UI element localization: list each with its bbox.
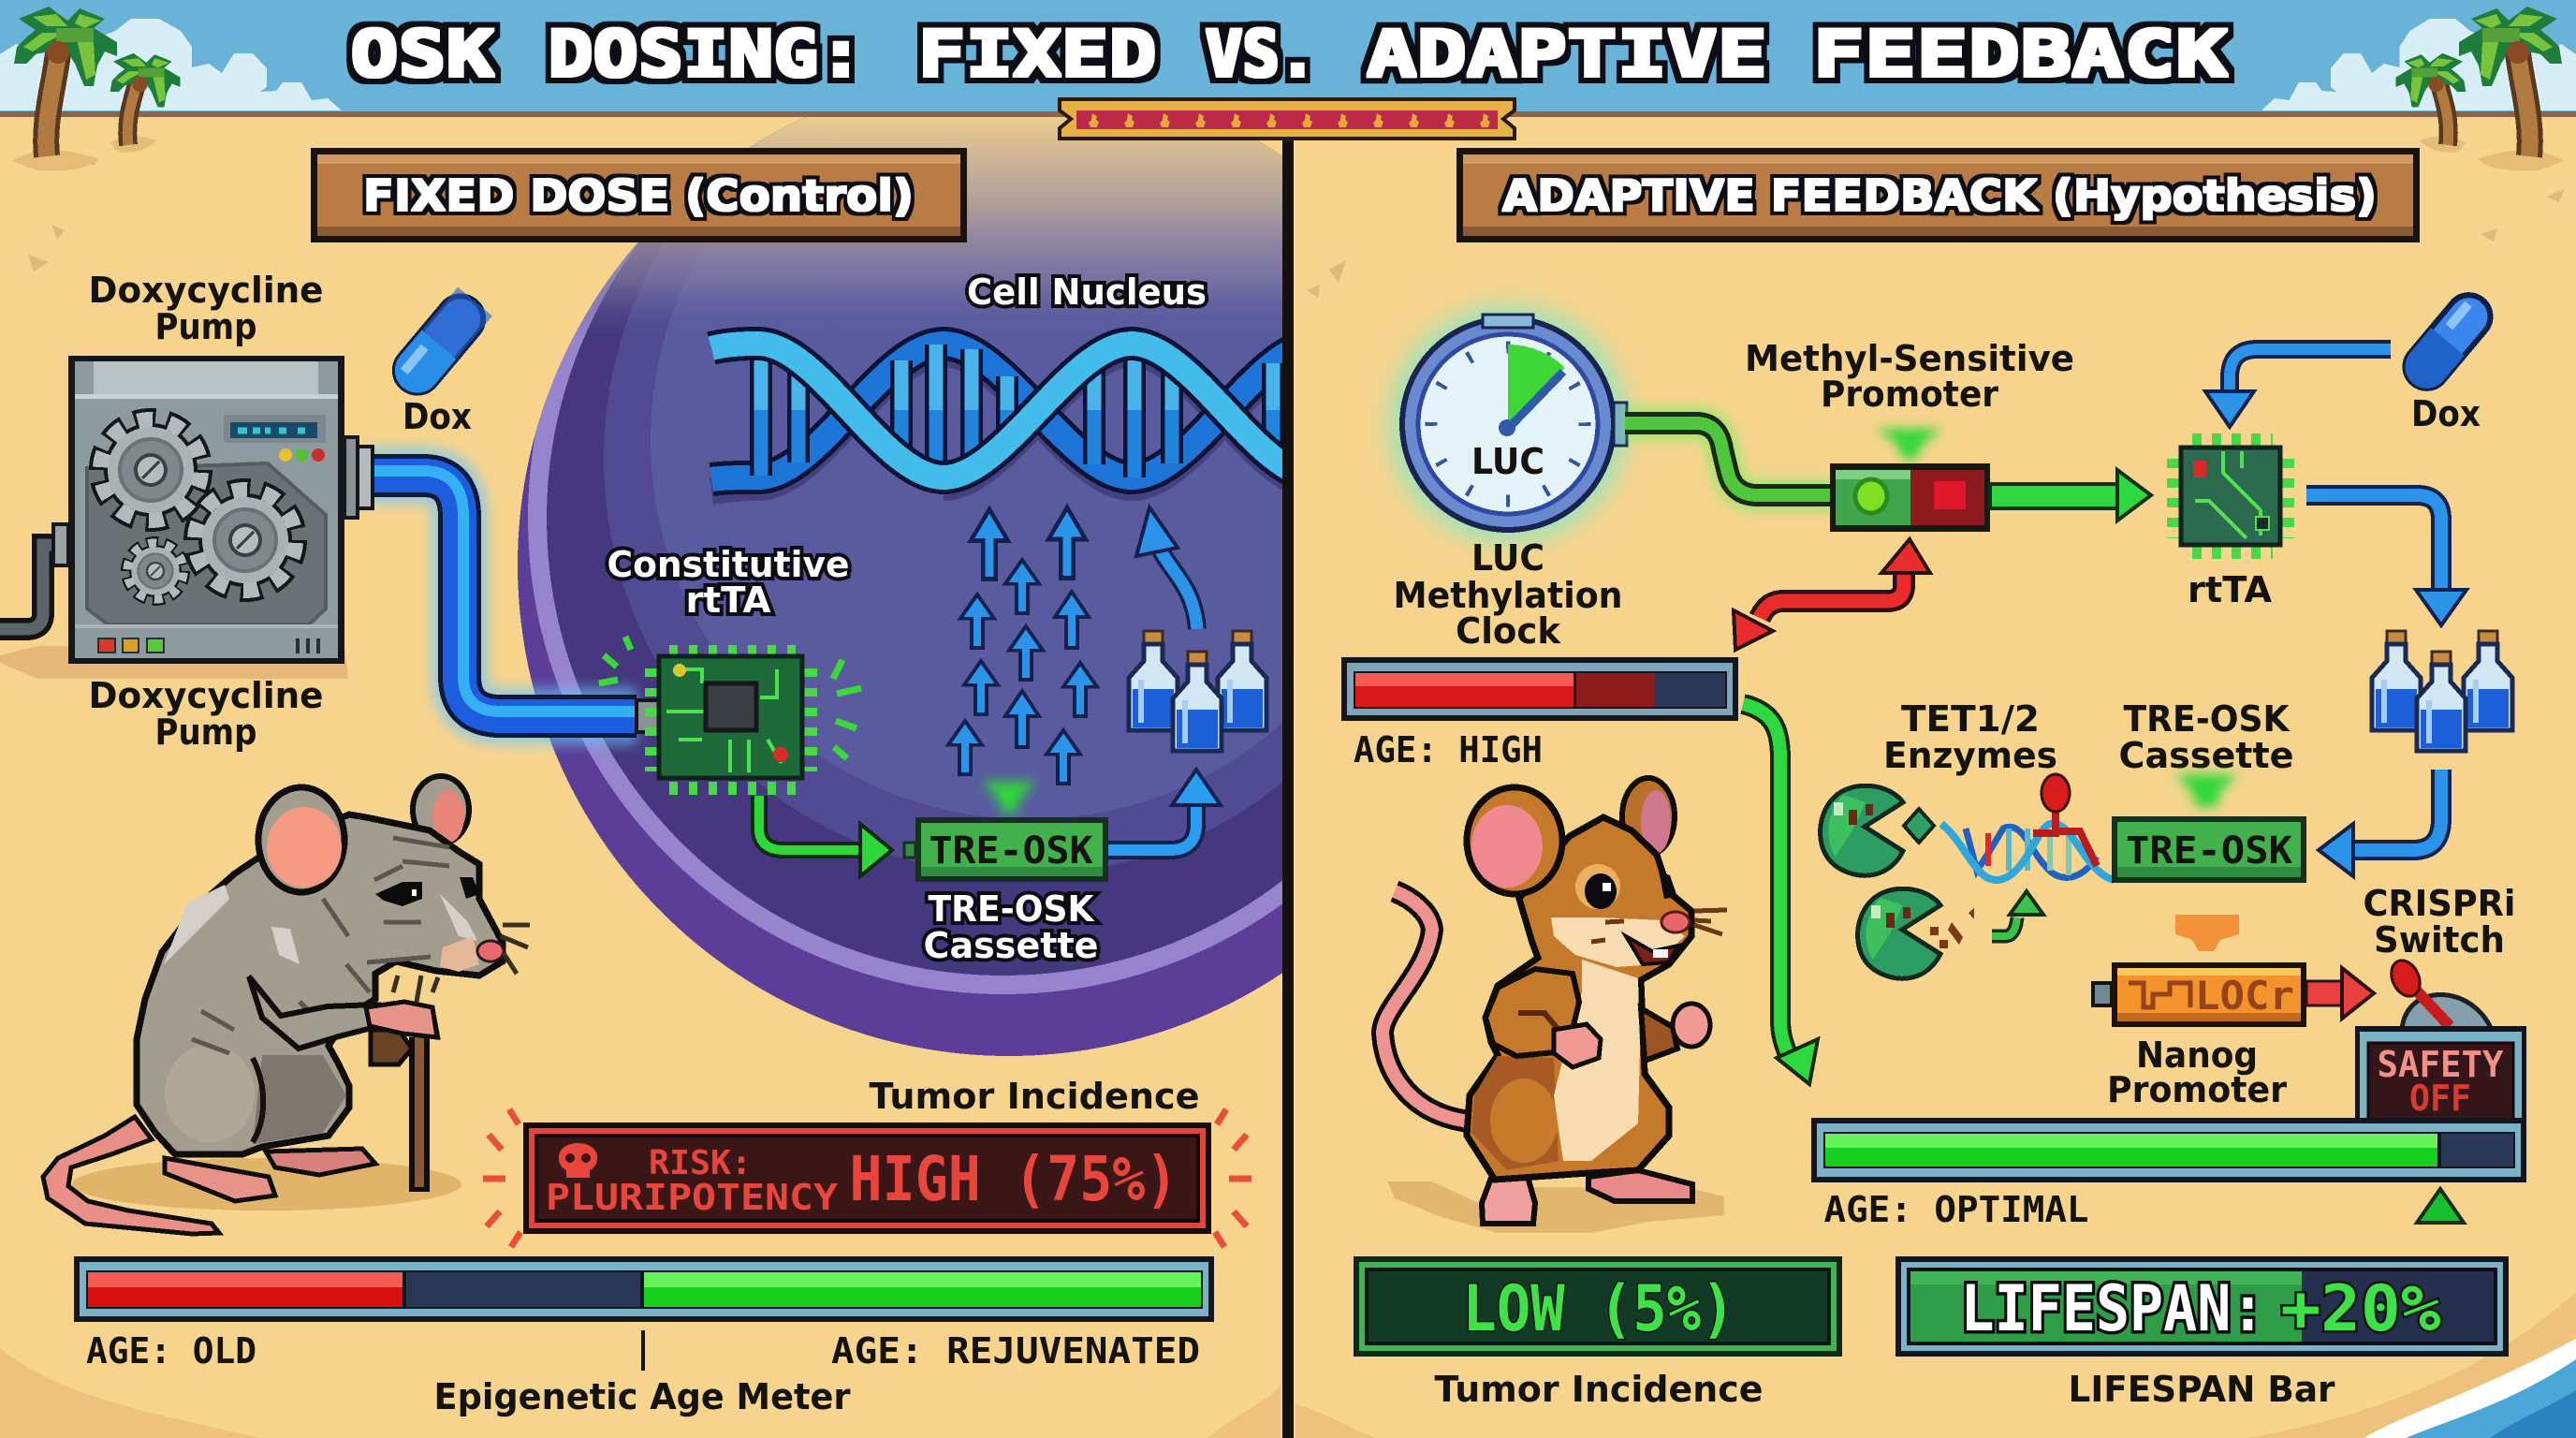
meter tick [641, 1330, 645, 1371]
mouse face patch [1551, 917, 1685, 967]
rat cane [371, 1030, 430, 1192]
label: age rejuvenated: AGE: REJUVENATED [831, 1330, 1200, 1372]
label: nanog promoter [2107, 1034, 2287, 1110]
rat arm and paw [249, 976, 437, 1049]
nucleus fade into sand [583, 117, 1282, 320]
icon: dox pill right [2396, 286, 2499, 397]
label: constitutive rtTA: rtTA [685, 580, 771, 621]
arrow: dox to chip [2205, 349, 2391, 427]
glow arrow: TRE activation right [2175, 774, 2237, 807]
LUC clock: LUC [1471, 441, 1544, 482]
label: CRISPRi switch: CRISPRi [2363, 883, 2516, 924]
arrow: vials to TRE-OSK right [2319, 770, 2441, 876]
rat highlights [164, 885, 477, 964]
sand darker corners [0, 1292, 2576, 1438]
heading board: fixed dose: FIXED DOSE (Control) [363, 170, 914, 221]
label: TRE-OSK cassette left [923, 888, 1099, 966]
label: nanog promoter: Nanog [2136, 1034, 2258, 1076]
label: methyl-sensitive promoter: Promoter [1821, 374, 1998, 415]
crumbs [1930, 908, 1974, 948]
label: cell nucleus: Cell Nucleus [967, 271, 1207, 313]
icon: pump cable [0, 524, 68, 629]
label: doxycycline pump bottom: Doxycycline [88, 675, 324, 716]
LUC clock [1388, 304, 1628, 544]
old gray rat [43, 776, 530, 1234]
epigenetic age meter [74, 1256, 1214, 1322]
icon: skull [559, 1143, 597, 1178]
rat haunch [165, 1045, 255, 1142]
mouse shadow [1387, 1181, 1724, 1233]
panel: low tumor incidence: LOW (5%) [1462, 1272, 1735, 1346]
label: CRISPRi switch [2363, 883, 2516, 961]
label: LUC methylation clock: Clock [1456, 610, 1561, 652]
mouse right arm [1641, 1008, 1677, 1061]
label: TRE-OSK cassette right: TRE-OSK [2123, 698, 2291, 740]
DNA double helix [711, 343, 1318, 491]
nanog orange box [2112, 962, 2306, 1027]
label: doxycycline pump bottom: Pump [155, 712, 256, 753]
mouse whiskers [1591, 910, 1727, 942]
methyl-sensitive promoter switch [1830, 463, 1990, 532]
mouse left foot [1482, 1170, 1535, 1224]
label: LUC methylation clock: LUC [1471, 537, 1544, 579]
icon: TET enzyme pacman bottom [1858, 888, 1940, 978]
small green curved arrow [1992, 891, 2043, 936]
pipe: blue flow to chip [370, 471, 637, 716]
icon: dox pill [386, 287, 492, 402]
sand shadow under pump [0, 646, 348, 679]
title: VS. [1206, 18, 1316, 92]
title: ADAPTIVE [1367, 18, 1767, 92]
label: age high: AGE: HIGH [1354, 729, 1543, 770]
label: doxycycline pump top: Pump [155, 306, 256, 347]
sky [0, 0, 2576, 111]
arrow: chip to cassette [759, 796, 892, 876]
safety off switch panel: SAFETY [2378, 1044, 2504, 1085]
nanog orange box: LOCr [2195, 973, 2294, 1019]
label: methyl-sensitive promoter: Methyl-Sensitive [1745, 338, 2074, 379]
TRE-OSK box right [2112, 816, 2306, 883]
rat nose and whiskers [477, 941, 504, 961]
rat body [137, 814, 503, 1154]
glow arrow: orange [2175, 915, 2239, 951]
mouse right paw [1673, 1004, 1710, 1047]
rat wrinkles [192, 838, 449, 1053]
mouse left paw [1554, 1024, 1601, 1067]
up arrows: transcription burst [948, 507, 1097, 784]
label: TRE-OSK cassette left: TRE-OSK [929, 888, 1095, 930]
panel: lifespan bar: +20% [2280, 1272, 2441, 1346]
label: TET1/2 enzymes: Enzymes [1883, 735, 2057, 776]
mouse shaded lower body [1471, 1056, 1559, 1170]
label: TET1/2 enzymes: TET1/2 [1901, 698, 2040, 740]
label: age old: AGE: OLD [86, 1330, 256, 1372]
rat muzzle [440, 936, 479, 972]
panel: lifespan bar [1895, 1256, 2509, 1357]
TRE-OSK box left [904, 817, 1108, 882]
label: constitutive rtTA [607, 544, 850, 621]
panel: risk callout: PLURIPOTENCY [546, 1177, 838, 1218]
label: doxycycline pump top: Doxycycline [88, 270, 324, 311]
mouse belly [1554, 960, 1640, 1161]
nucleus lavender ring and dark rim [528, 117, 1282, 994]
icon: TET enzyme pacman top [1821, 785, 1903, 875]
icon: doxycycline pump [68, 356, 344, 664]
connector: clock to promoter [1625, 423, 1833, 495]
arrow: red feedback [1734, 539, 1930, 650]
label: nanog promoter: Promoter [2107, 1069, 2287, 1110]
mouse far ear [1622, 778, 1675, 855]
arrow: long green age feedback [1743, 704, 1818, 1084]
label: tumor incidence right: Tumor Incidence [1434, 1369, 1764, 1410]
pump recess [87, 463, 326, 624]
young brown mouse [1383, 778, 1727, 1233]
methyl lollipop [2033, 774, 2097, 866]
sand specks [28, 157, 2565, 298]
icon: switch lever [2386, 956, 2492, 1030]
pump leds [279, 448, 292, 462]
glow arrow: promoter [1877, 429, 1942, 459]
label: constitutive rtTA: Constitutive [607, 544, 850, 585]
bar: age high [1341, 657, 1738, 721]
clouds left [0, 19, 342, 110]
title: DOSING: [549, 18, 863, 92]
label: dox: Dox [402, 396, 472, 437]
glow arrow: TRE activation left [981, 782, 1037, 813]
label: LUC methylation clock [1393, 537, 1623, 652]
clouds right [2261, 19, 2576, 110]
divider [1282, 138, 1294, 1438]
title [350, 18, 2228, 92]
arrow: nanog to switch [2306, 968, 2374, 1019]
rat back foot far [266, 1149, 375, 1175]
panel: risk callout: HIGH (75%) [850, 1143, 1178, 1215]
rat eyes [375, 882, 422, 906]
mouse right leg and foot [1588, 1170, 1692, 1201]
title banner ribbon [1060, 99, 1515, 139]
nucleus mid band [604, 117, 1282, 866]
safety off switch panel [2355, 1026, 2526, 1123]
bar: age optimal [1811, 1118, 2526, 1182]
label: tumor incidence left: Tumor Incidence [869, 1076, 1200, 1117]
panel: lifespan bar: LIFESPAN: [1960, 1272, 2265, 1346]
vials: OSK right [2372, 631, 2512, 751]
panel: fixed dose nucleus [518, 117, 1282, 1056]
mouse near ear [1467, 787, 1562, 894]
palm trees left [11, 7, 180, 170]
title: FIXED [917, 18, 1157, 92]
label: doxycycline pump bottom [88, 675, 324, 753]
risk rays [483, 1109, 1251, 1247]
horizon line [0, 111, 2576, 117]
rat far ear [413, 776, 469, 844]
methyl diamond [1904, 809, 1934, 843]
mouse body [1467, 817, 1691, 1180]
mouse left arm [1486, 969, 1579, 1056]
label: lifespan bar: LIFESPAN Bar [2069, 1369, 2335, 1410]
mouse eyes [1575, 864, 1620, 909]
mouse nose [1661, 912, 1690, 932]
nucleus interior [651, 140, 1282, 817]
pump display [224, 415, 326, 443]
rat near ear [258, 787, 344, 892]
chip sparks [599, 637, 861, 758]
small DNA [1941, 824, 2114, 880]
arrow: chip to vials [2306, 495, 2466, 625]
title: OSK [350, 18, 494, 92]
TRE-OSK box right: TRE-OSK [2126, 829, 2292, 873]
label: LUC methylation clock: Methylation [1393, 575, 1623, 616]
rat shadow [72, 1158, 461, 1211]
marker triangle [2417, 1189, 2464, 1223]
safety off switch panel: OFF [2409, 1078, 2471, 1119]
label: dox right: Dox [2411, 393, 2481, 434]
TRE-OSK box left: TRE-OSK [929, 829, 1093, 873]
label: epigenetic age meter: Epigenetic Age Meter [434, 1376, 851, 1417]
vials: OSK [1129, 631, 1266, 751]
heading board: adaptive feedback [1456, 148, 2420, 242]
label: CRISPRi switch: Switch [2374, 919, 2505, 961]
label: age optimal: AGE: OPTIMAL [1823, 1189, 2089, 1230]
rat darker lower body [253, 1055, 346, 1144]
nanog promoter stub [2093, 983, 2112, 1005]
icon: rtTA chip [637, 652, 811, 788]
mouse tail [1383, 891, 1474, 1123]
pump connector [344, 437, 373, 518]
heading board: fixed dose [311, 148, 967, 242]
label: TET1/2 enzymes [1883, 698, 2057, 776]
nucleus outer membrane [518, 118, 1282, 1056]
label: rtTA: rtTA [2188, 569, 2273, 610]
label: TRE-OSK cassette right [2119, 698, 2293, 776]
mouse haunch [1490, 1078, 1558, 1163]
curved arrow to DNA [1136, 507, 1197, 629]
rat near foot [165, 1158, 275, 1201]
ocean wave corner [2364, 1339, 2576, 1438]
rat tail [43, 1117, 219, 1234]
arrow: cassette to vials [1108, 770, 1221, 850]
panel: low tumor incidence [1354, 1256, 1842, 1357]
title: FEEDBACK [1812, 18, 2228, 92]
mouse mouth [1626, 936, 1678, 964]
label: doxycycline pump top [88, 270, 324, 347]
palm trees right [2396, 7, 2565, 170]
label: TRE-OSK cassette right: Cassette [2119, 735, 2293, 776]
icon: rtTA chip right [2174, 440, 2288, 552]
panel: risk callout [523, 1123, 1211, 1234]
label: methyl-sensitive promoter [1745, 338, 2074, 415]
panel: risk callout: RISK: [649, 1144, 752, 1182]
arrow: promoter to chip [1990, 470, 2151, 521]
heading board: adaptive feedback: ADAPTIVE FEEDBACK (Hypothesis) [1502, 170, 2377, 221]
label: TRE-OSK cassette left: Cassette [923, 925, 1099, 966]
